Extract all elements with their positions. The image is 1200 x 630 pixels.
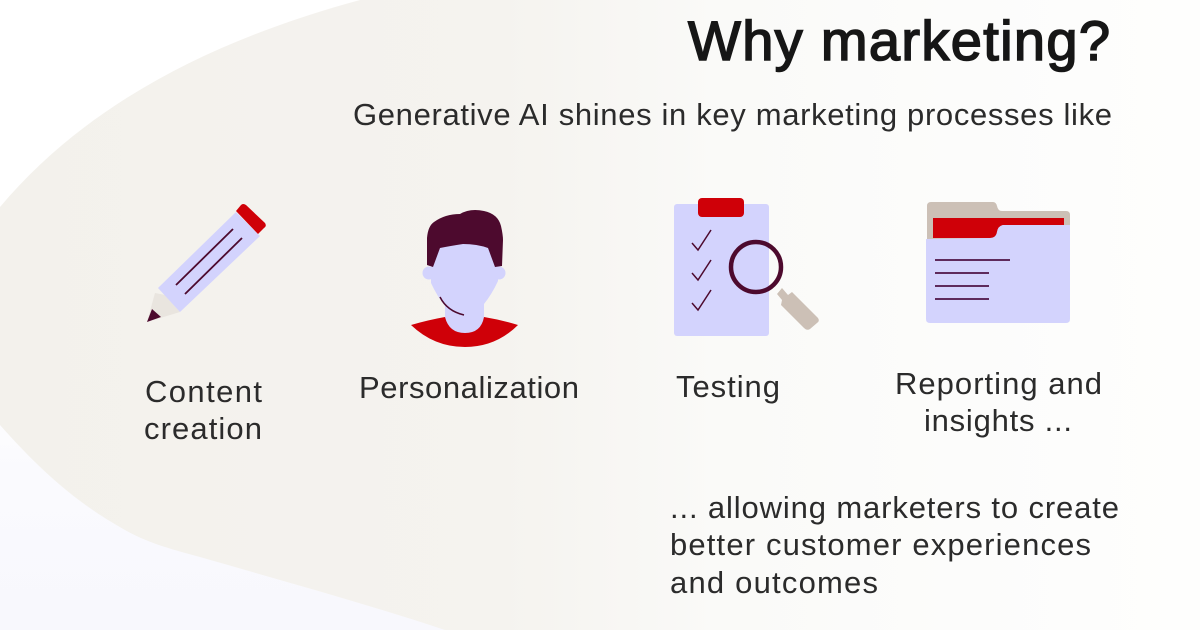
label: content creation: Content	[145, 374, 262, 409]
icon: person	[411, 210, 518, 347]
subtitle: Generative AI shines in key marketing processes like	[353, 97, 1112, 132]
icon: folder	[926, 202, 1070, 323]
icon: pencil	[147, 204, 266, 322]
label: content creation: creation	[144, 411, 262, 446]
closing statement: better customer experiences	[670, 527, 1091, 562]
closing statement: ... allowing marketers to create	[670, 490, 1119, 525]
label: reporting and insights: Reporting and	[895, 366, 1102, 401]
icon: clipboard with magnifier	[674, 198, 819, 336]
label: testing: Testing	[676, 369, 780, 404]
closing statement: and outcomes	[670, 565, 878, 600]
label: reporting and insights	[895, 366, 1102, 438]
label: content creation	[144, 374, 262, 446]
closing statement	[670, 490, 1119, 600]
label: reporting and insights: insights ...	[924, 403, 1072, 438]
label: personalization: Personalization	[359, 370, 579, 405]
title: Why marketing?	[688, 9, 1110, 72]
